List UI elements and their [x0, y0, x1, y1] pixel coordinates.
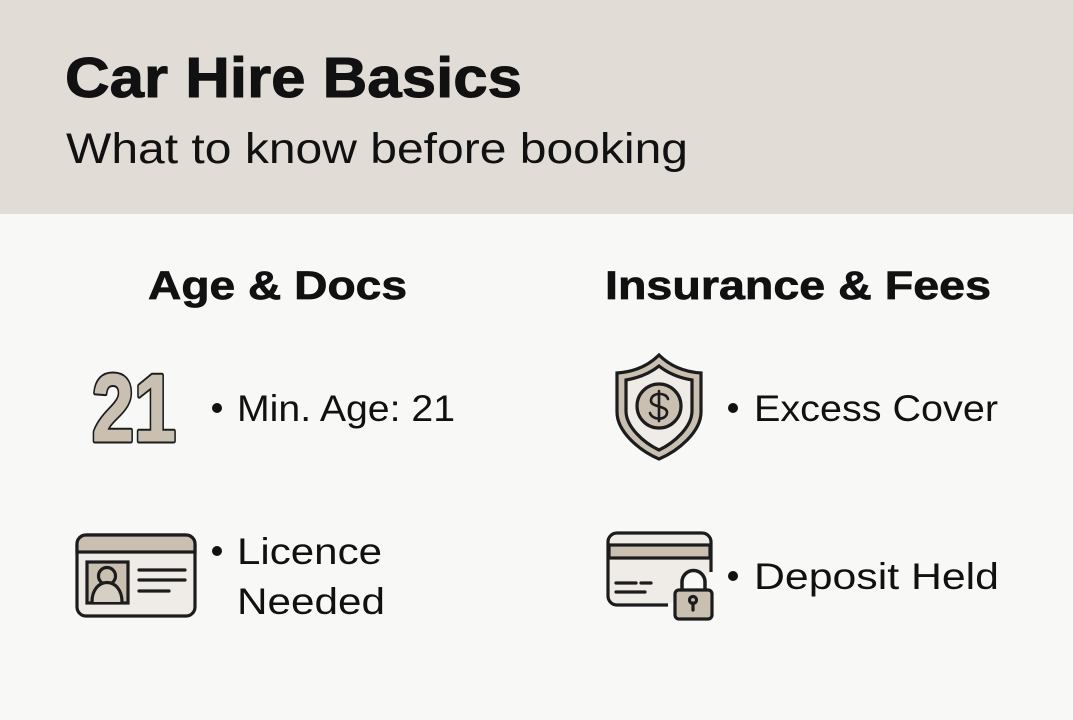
icon: number 21: 21	[92, 355, 176, 462]
title: Car Hire Basics	[65, 46, 522, 110]
icon: number 21: 21	[92, 355, 176, 462]
item: licence needed	[212, 531, 385, 622]
item: deposit held: Deposit Held	[754, 556, 999, 597]
heading: age and docs: Age & Docs	[148, 264, 407, 308]
icon: card with padlock	[608, 533, 712, 619]
item: licence needed: Licence	[237, 531, 382, 572]
item: licence needed: Needed	[237, 581, 385, 622]
heading: insurance and fees: Insurance & Fees	[605, 264, 991, 308]
panel: insurance and fees	[605, 264, 999, 619]
icon: licence card	[77, 535, 195, 616]
icon: shield with dollar	[617, 355, 701, 459]
header band	[0, 0, 1073, 214]
item: minimum age: Min. Age: 21	[237, 388, 455, 429]
item: excess cover: Excess Cover	[754, 388, 998, 429]
panel: age and docs	[77, 264, 455, 622]
subtitle: What to know before booking	[66, 125, 688, 173]
